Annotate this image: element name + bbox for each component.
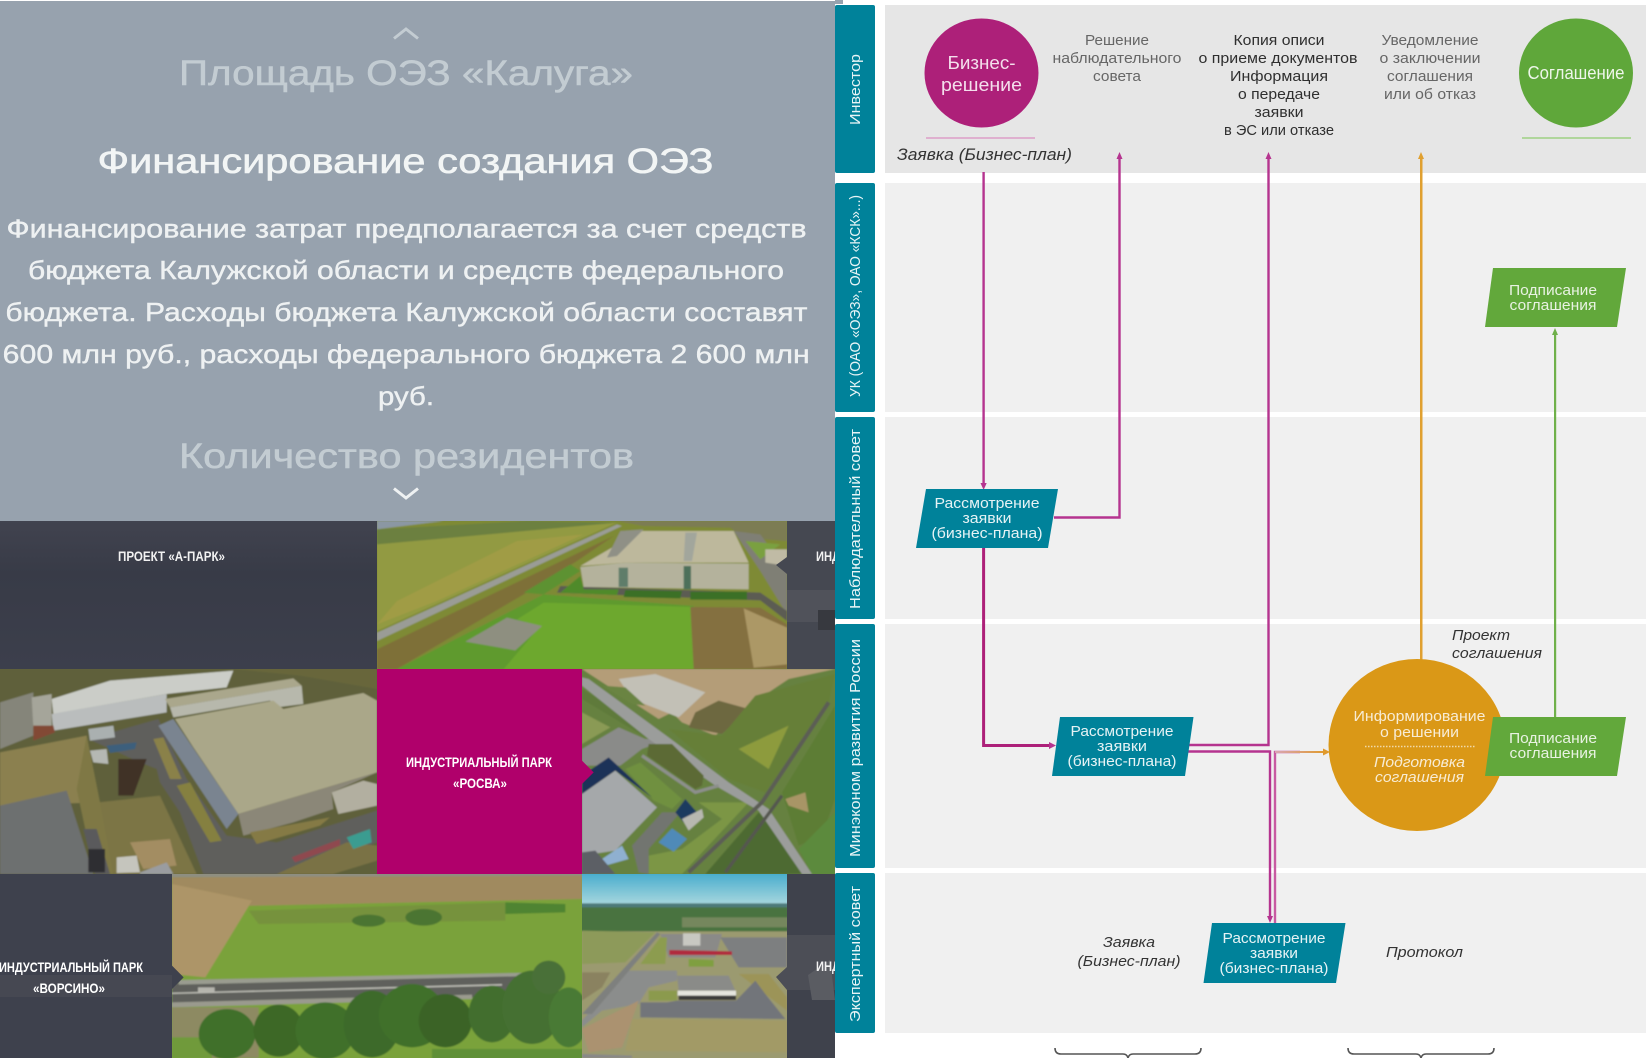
photo: green field with road and trees	[169, 871, 589, 1058]
text block: financing description: бюджета Калужской области и средств федерального	[28, 255, 784, 285]
circle: informing about decision: соглашения	[1375, 769, 1464, 786]
notch	[172, 966, 184, 989]
text: supervisory board decision: Решение	[1085, 33, 1149, 49]
text block: financing description: 600 млн руб., расходы федерального бюджета 2 600 млн	[3, 339, 810, 369]
photo: construction site, road and rails	[579, 666, 839, 879]
text: notification	[1380, 33, 1480, 103]
text: notification: или об отказ	[1384, 87, 1476, 103]
box: signing agreement top: Подписание	[1509, 282, 1597, 299]
text: notification: Уведомление	[1382, 33, 1478, 49]
tile: Rosva industrial park	[377, 669, 594, 874]
circle: agreement	[1519, 18, 1633, 139]
box: review by supervisory board: заявки	[962, 510, 1012, 527]
tile: Vorsino industrial park: «ВОРСИНО»	[33, 981, 105, 996]
text: copy of inventory: Информация	[1230, 69, 1328, 85]
text: notification: о заключении	[1380, 51, 1480, 67]
tile: Rosva industrial park: «РОСВА»	[453, 776, 507, 791]
circle: informing about decision	[1328, 659, 1506, 831]
text block: financing description	[3, 214, 810, 411]
swimlane: management company: УК (ОАО «ОЭЗ», ОАО «КСК»...)	[847, 195, 864, 397]
text: copy of inventory: о передаче	[1238, 87, 1320, 103]
circle: agreement: Соглашение	[1528, 63, 1624, 83]
brace: right	[1348, 1048, 1494, 1058]
tile: Vorsino industrial park: ИНДУСТРИАЛЬНЫЙ ПАРК	[0, 960, 144, 975]
photo: large factory roof	[0, 666, 380, 879]
text block: financing description: Финансирование затрат предполагается за счет средств	[6, 214, 807, 244]
text: copy of inventory: о приеме документов	[1198, 51, 1358, 67]
label: application: (Бизнес-план)	[1078, 953, 1180, 970]
photo: aerial of factory and lawn	[374, 518, 790, 672]
swimlane: expert council: Экспертный совет	[847, 886, 864, 1022]
tile: Rosva industrial park: ИНДУСТРИАЛЬНЫЙ ПАРК	[406, 755, 553, 770]
swimlane: ministry of economic development: Минэконом развития России	[847, 639, 864, 857]
brace: left	[1055, 1048, 1201, 1058]
circle: informing about decision: Информирование	[1354, 708, 1486, 725]
tile: cropped park label lower	[776, 874, 840, 1058]
arrow: orange to investor	[1418, 152, 1424, 663]
label: draft agreement: соглашения	[1452, 645, 1542, 662]
tile: project A-Park: ПРОЕКТ «А-ПАРК»	[118, 549, 225, 564]
text: copy of inventory	[1198, 33, 1358, 139]
icon: chevron up	[394, 29, 418, 38]
icon: chevron down	[394, 488, 418, 498]
text: copy of inventory: Копия описи	[1234, 33, 1324, 49]
circle: informing about decision: о решении	[1380, 724, 1459, 741]
swimlane: expert council	[835, 873, 1646, 1033]
box: review by ministry: заявки	[1097, 738, 1147, 755]
arrows: magenta flow	[980, 152, 1330, 923]
tile: cropped park label: ИНД	[816, 549, 840, 564]
swimlane: investor	[835, 5, 1646, 173]
box: signing agreement top	[1485, 268, 1626, 327]
box: review by ministry: (бизнес-плана)	[1068, 753, 1176, 770]
box: review by expert council: Рассмотрение	[1222, 930, 1326, 947]
arrow: green to signing box	[1552, 328, 1558, 719]
box: review by expert council: (бизнес-плана)	[1220, 960, 1328, 977]
tile: cropped park label	[776, 521, 840, 669]
heading: number of residents: Количество резидентов	[179, 437, 634, 476]
label: application: Заявка	[1103, 934, 1155, 951]
text block: financing description: руб.	[378, 381, 434, 411]
swimlane: management company	[835, 183, 1646, 412]
panel: financing text	[0, 0, 843, 521]
box: signing agreement ministry	[1485, 717, 1626, 776]
text: copy of inventory: в ЭС или отказе	[1224, 123, 1334, 139]
heading: financing: Финансирование создания ОЭЗ	[98, 142, 714, 181]
photo grid	[0, 518, 840, 1058]
box: review by expert council	[1204, 923, 1346, 983]
box: review by ministry: Рассмотрение	[1070, 723, 1174, 740]
circle: business decision: Бизнес-	[948, 53, 1016, 73]
box: review by ministry	[1052, 717, 1194, 776]
box: signing agreement top: соглашения	[1510, 297, 1596, 314]
label: application	[1078, 934, 1180, 970]
circle: business decision	[924, 18, 1038, 139]
tile: project A-Park	[0, 521, 377, 669]
box: review by supervisory board: Рассмотрение	[934, 495, 1040, 512]
box: review by supervisory board	[916, 489, 1058, 548]
swimlane: ministry of economic development	[835, 624, 1646, 868]
photo: logistics complex with sky	[579, 871, 792, 1058]
heading: area of the zone: Площадь ОЭЗ «Калуга»	[179, 54, 633, 93]
text block: financing description: бюджета. Расходы бюджета Калужской области составят	[5, 297, 808, 327]
circle: informing about decision: Подготовка	[1374, 754, 1465, 771]
tile: Vorsino industrial park	[0, 874, 183, 1058]
tile: cropped park label lower: ИНД	[816, 959, 840, 974]
box: review by supervisory board: (бизнес-плана)	[932, 525, 1042, 542]
label: draft agreement	[1452, 627, 1542, 662]
text: supervisory board decision: наблюдательного	[1052, 51, 1182, 67]
circle: business decision: решение	[941, 75, 1022, 95]
text: notification: соглашения	[1387, 69, 1473, 85]
text: copy of inventory: заявки	[1254, 105, 1304, 121]
label: protocol: Протокол	[1386, 944, 1464, 961]
label: application business plan: Заявка (Бизнес-план)	[897, 146, 1072, 164]
text: supervisory board decision	[1052, 33, 1182, 85]
text: supervisory board decision: совета	[1093, 69, 1142, 85]
label: draft agreement: Проект	[1452, 627, 1510, 644]
notch	[582, 761, 594, 784]
swimlane: supervisory board	[835, 417, 1646, 619]
swimlane: investor: Инвестор	[847, 54, 864, 125]
swimlane: supervisory board: Наблюдательный совет	[847, 429, 864, 609]
box: review by expert council: заявки	[1250, 945, 1298, 962]
box: signing agreement ministry: Подписание	[1509, 730, 1597, 747]
box: signing agreement ministry: соглашения	[1510, 745, 1596, 762]
